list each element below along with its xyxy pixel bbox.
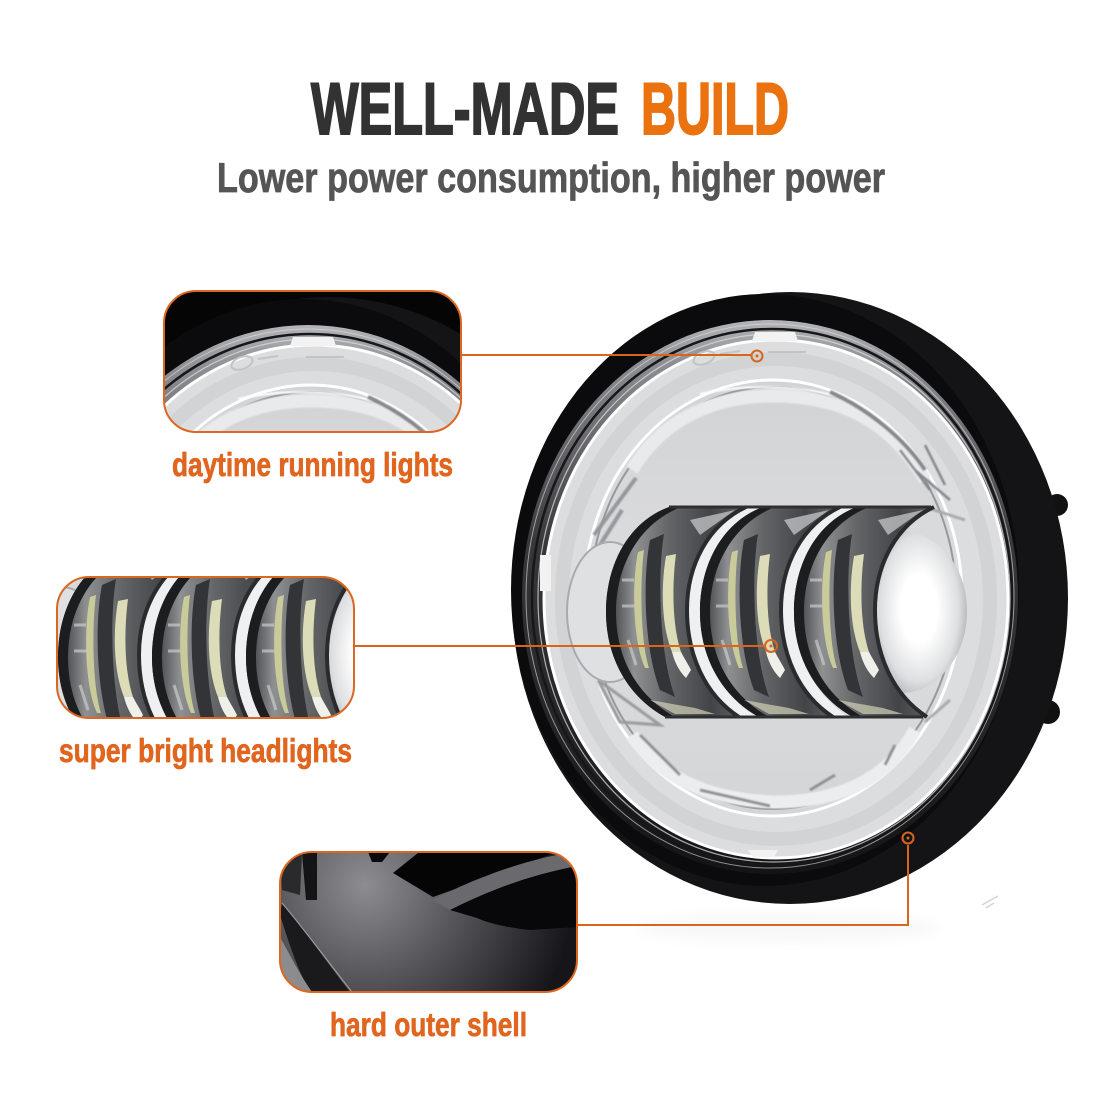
panel: super bright headlights xyxy=(56,576,355,719)
faint floor shadow xyxy=(640,914,940,942)
title: WELL-MADE xyxy=(311,69,619,150)
subtitle: Lower power consumption, higher power xyxy=(217,154,885,201)
label: daytime running lights: daytime running lights xyxy=(172,446,453,483)
connector: hard outer shell xyxy=(577,832,914,925)
label: super bright headlights: super bright headlights xyxy=(59,732,352,769)
title: BUILD xyxy=(641,69,789,150)
connector: daytime running lights xyxy=(461,350,762,362)
connector: super bright headlights xyxy=(354,640,777,652)
label: hard outer shell: hard outer shell xyxy=(330,1006,527,1043)
panel: hard outer shell xyxy=(280,852,577,992)
main product: headlight xyxy=(511,292,1068,904)
small reflection mark xyxy=(982,896,998,908)
panel: daytime running lights xyxy=(163,290,462,433)
